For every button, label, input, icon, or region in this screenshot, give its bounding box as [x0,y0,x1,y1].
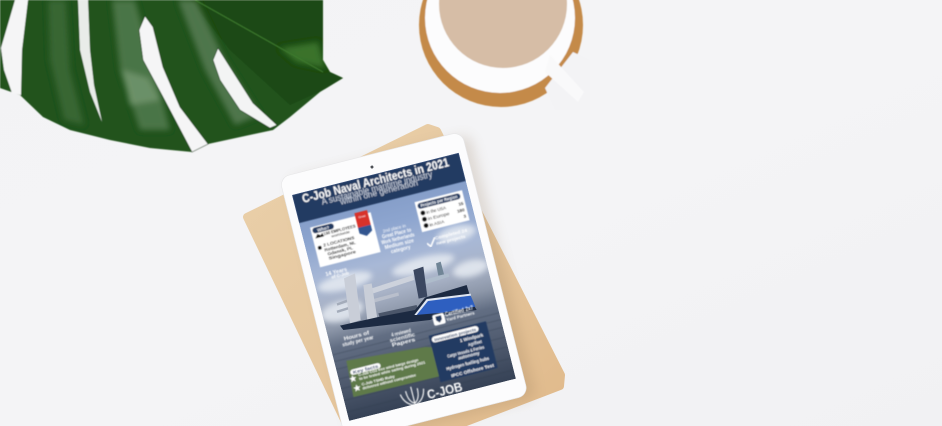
locations: 2 LOCATIONS [323,235,355,248]
star 2 [353,384,361,392]
header band [292,152,466,223]
monstera leaf [0,0,345,155]
panel: projects per region [415,190,470,232]
cup handle [545,55,584,102]
years text: 14 Years [325,267,348,278]
award badge: Great [358,214,366,219]
stat: reviewed papers [389,328,416,348]
stat: reviewed papers: scientific [389,332,416,344]
award text block: Work Netherlands [381,232,415,246]
fact 1: to be tested while sailing during 2021 [359,361,426,381]
locations: Singapore [328,249,357,261]
stat: reviewed papers: Papers [391,337,416,349]
certification badge: Certified 2x7 [445,305,475,318]
stat: hours saved: Hours of [343,330,370,343]
panel: who is C-Job [310,212,381,267]
pill heading: Projects per Region [420,194,458,208]
region rows: 180 [456,207,466,214]
boom and bridge deck [423,273,449,284]
employees: 150 EMPLOYEES [323,223,356,236]
title: C-Job Naval Architects in 2021 [301,155,451,206]
subtitle line 2: within one generation [338,178,419,207]
project list: Hydrogen fuelling hubs [446,356,490,371]
overlay content [342,304,498,406]
wing sails [344,273,377,323]
pill heading: Innovation projects [434,327,477,342]
wordmark: C-JOB [425,379,464,402]
tablet shadow [288,134,537,426]
locations: Rotterdam, NL [324,240,356,253]
certification badge [432,305,476,326]
employees note: worldwide [331,230,350,239]
trident mark [399,386,425,406]
project list: IPCC Offshore Test [451,363,495,378]
wooden board [247,128,561,426]
award text block [380,224,415,254]
project list: 1 Windpark [459,332,484,343]
leaf slit 4 [213,48,277,128]
coffee [439,0,567,68]
fact 2: delivered without compromise [362,373,416,391]
locations [323,235,359,261]
completed projects text: Completed 24 [434,228,468,241]
region rows [420,200,468,229]
stat: hours saved [342,330,374,347]
award text block: Medium size [384,238,415,251]
icon: map pin [317,245,322,250]
ship [337,262,477,330]
sky and sea image [292,153,516,421]
hull [340,285,477,330]
locations: Gdansk, PL [327,245,354,257]
panel: key facts [346,346,440,398]
pill heading: Who? [317,225,330,233]
fact 2: C-Job TSHD Ruby [361,374,396,387]
icon: people [314,233,324,239]
clouds [307,220,493,326]
project list: autonomy [458,350,481,361]
project list: Cargo Vessels & Ferries [447,344,485,359]
panel: innovation projects [429,321,498,382]
wing blades [337,275,414,313]
stat: hours saved: study per year [342,335,375,349]
screen [290,152,517,421]
tablet body [279,131,528,426]
region rows: in Europe [427,211,450,221]
tablet [279,131,528,426]
blue hull band [415,296,475,315]
leaf slit 3 [139,16,208,152]
camera [370,165,374,169]
crane [413,267,427,299]
region rows: in the USA [426,205,447,215]
certification badge: Yard Partners [446,310,476,322]
subtitle line 1: A sustainable maritime industry [320,169,434,207]
award badge [354,210,373,237]
region rows: in ASIA [429,219,446,228]
star 1 [349,375,357,383]
region rows: 3 [463,213,467,219]
sea ripples [333,312,508,380]
icon: check mark [426,237,437,247]
white hull stripe [414,294,471,315]
project list: Agrifleet [468,339,483,347]
completed projects text [434,228,468,246]
completed projects text: new projects [436,234,466,246]
years text: of C-Job [331,270,350,280]
C-Job logo [399,382,463,406]
award text block: Great Place to [381,227,413,241]
mast [436,262,444,276]
region rows: 15 [458,201,464,207]
coffee cup on cork coaster [419,0,590,110]
stat: reviewed papers: 4 reviewed [391,328,412,339]
project list [445,332,495,378]
deck house [378,305,418,318]
award text block: category [390,245,411,255]
pill heading: Key facts [352,363,379,375]
leaf slit 2 [78,0,102,122]
fact 1: C-Job CO2 free wind barge design [358,358,419,377]
leaf slit 1 [1,0,28,95]
cork coaster [419,0,583,107]
handle gap in coaster [545,52,590,110]
award text block: 2nd place in [382,223,407,234]
saucer and cup rim [425,0,575,93]
